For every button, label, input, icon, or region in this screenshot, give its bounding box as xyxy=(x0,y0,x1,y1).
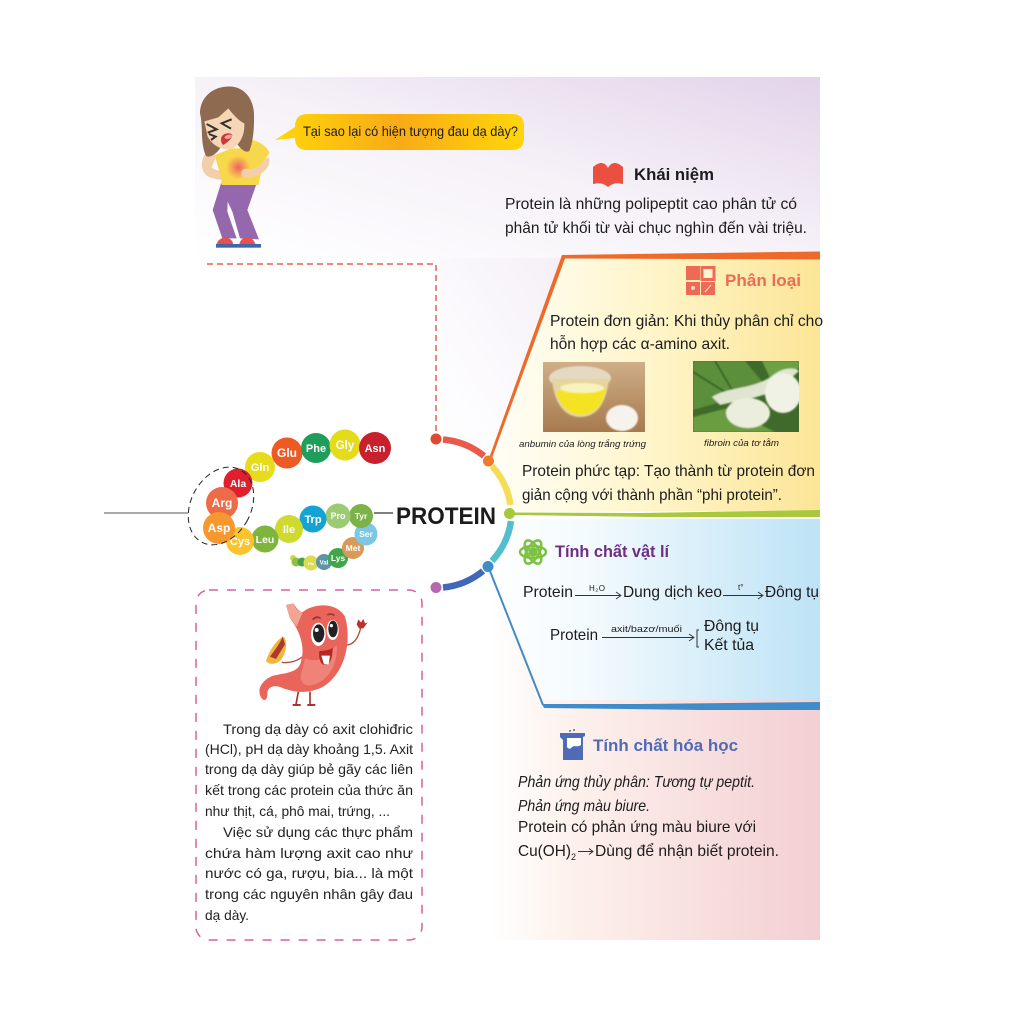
diagram: amino acid chain: Phe xyxy=(306,443,326,455)
upper body and head xyxy=(200,87,270,185)
text block: chemical reactions: Cu(OH) xyxy=(518,843,571,860)
diagram: amino acid chain: Glu xyxy=(277,446,297,460)
illustration: woman with stomach ache xyxy=(200,87,270,248)
equation: protein in water: Đông tụ xyxy=(765,584,819,601)
icon: classification squares xyxy=(686,266,715,295)
node: green xyxy=(504,508,515,519)
callout: speech bubble question: Tại sao lại có hiện tượng đau dạ dày? xyxy=(303,124,518,139)
diagram: amino acid chain: Met xyxy=(346,543,360,553)
node: orange xyxy=(483,456,494,466)
diagram: amino acid chain xyxy=(175,430,391,570)
diagram: amino acid chain: Cys xyxy=(230,536,250,548)
text block: simple protein: hỗn hợp các α-amino axit. xyxy=(550,334,730,353)
equation: protein with acid, base, salt: Đông tụ xyxy=(704,618,759,635)
text block: stomach acid xyxy=(205,722,413,923)
text block: stomach acid: Việc sử dụng các thực phẩm xyxy=(223,825,413,840)
text block: complex protein: giản cộng với thành phần “phi protein”. xyxy=(522,487,782,504)
connector: chain to title xyxy=(374,512,393,514)
node: red xyxy=(430,434,442,444)
text block: definition xyxy=(505,196,807,237)
diagram: amino acid chain: Lys xyxy=(331,553,345,563)
diagram: amino acid chain: Asp xyxy=(208,521,230,535)
highlight: dashed ellipse around amino acids xyxy=(175,456,267,556)
diagram: amino acid chain: Leu xyxy=(256,534,274,546)
text block: definition: Protein là những polipeptit cao phân tử có xyxy=(505,196,797,213)
equation: protein with acid, base, salt: axit/bazơ/muối xyxy=(611,624,682,635)
equation: protein with acid, base, salt: Protein xyxy=(550,627,598,644)
icon: book xyxy=(593,163,623,187)
heading: Khái niệm: Khái niệm xyxy=(634,166,714,184)
diagram: amino acid chain: Gly xyxy=(336,440,355,452)
title: PROTEIN xyxy=(396,503,496,530)
equation: protein in water: Protein xyxy=(523,584,573,601)
equation: protein with acid, base, salt xyxy=(550,618,759,654)
text block: stomach acid: nước có ga, rượu, bia... là một xyxy=(205,866,413,881)
text block: complex protein: Protein phức tạp: Tạo thành từ protein đơn xyxy=(522,463,815,480)
equation: protein in water: t° xyxy=(738,583,743,592)
diagram: amino acid chain: His xyxy=(308,561,315,566)
equation: protein in water: Dung dịch keo xyxy=(623,584,722,601)
heading: Tính chất vật lí: Tính chất vật lí xyxy=(555,543,670,561)
text block: simple protein: Protein đơn giản: Khi thủy phân chỉ cho xyxy=(550,313,823,330)
panel: fade below top background xyxy=(440,258,570,462)
image: silkworm and cocoons on leaves xyxy=(693,361,801,432)
panel: physical properties xyxy=(488,519,820,710)
text block: chemical reactions: Dùng để nhận biết protein. xyxy=(595,842,779,860)
heading: Tính chất hóa học: Tính chất hóa học xyxy=(593,737,738,755)
panel: top background xyxy=(195,77,820,258)
diagram: amino acid chain: Ala xyxy=(230,478,246,490)
callout: speech bubble question xyxy=(275,114,524,150)
diagram: amino acid chain: Ile xyxy=(283,524,295,536)
diagram: amino acid chain: Pro xyxy=(330,511,346,521)
text block: stomach acid: trong dạ dày giúp bẻ gãy các liên xyxy=(205,762,413,777)
legs and shoes xyxy=(213,183,261,248)
panel: classification xyxy=(488,252,823,517)
diagram: amino acid chain: Tyr xyxy=(355,511,368,521)
text block: chemical reactions: Phản ứng màu biure. xyxy=(518,798,650,815)
equation: protein in water xyxy=(523,583,819,601)
text block: stomach acid: trong các nguyên nhân gây đau xyxy=(205,887,413,902)
diagram: amino acid chain: Asn xyxy=(365,443,386,455)
caption: fibroin: fibroin của tơ tằm xyxy=(704,438,779,449)
text block: stomach acid: Trong dạ dày có axit clohiđric xyxy=(223,722,413,737)
diagram: amino acid chain: Val xyxy=(320,560,329,566)
caption: albumin: anbumin của lòng trắng trứng xyxy=(519,439,647,450)
diagram: amino acid chain: Gln xyxy=(251,462,269,474)
text block: stomach acid: dạ dày. xyxy=(205,908,249,923)
connector: line to left edge xyxy=(104,512,188,514)
node: purple xyxy=(430,582,442,593)
diagram: amino acid chain: Ser xyxy=(359,529,374,539)
text block: stomach acid: kết trong các protein của thức ăn xyxy=(205,783,413,798)
text block: simple protein xyxy=(550,313,823,353)
panel: chemical properties background xyxy=(490,570,820,940)
equation: protein with acid, base, salt: Kết tủa xyxy=(704,637,754,654)
diagram: amino acid chain: Arg xyxy=(212,496,232,510)
connector: dashed line to woman xyxy=(207,264,436,433)
text block: stomach acid: như thịt, cá, phô mai, trứng, ... xyxy=(205,804,390,819)
heading: Phân loại: Phân loại xyxy=(725,271,801,290)
text block: chemical reactions: 2 xyxy=(571,852,576,862)
text block: stomach acid: (HCl), pH dạ dày khoảng 1,5. Axit xyxy=(205,742,413,757)
icon: beaker xyxy=(560,729,585,760)
text block: stomach acid: chứa hàm lượng axit cao như xyxy=(205,846,413,861)
text block: definition: phân tử khối từ vài chục nghìn đến vài triệu. xyxy=(505,220,807,237)
text block: chemical reactions xyxy=(518,774,779,862)
text block: chemical reactions: Protein có phản ứng màu biure với xyxy=(518,819,756,836)
text block: chemical reactions: Phản ứng thủy phân: Tương tự peptit. xyxy=(518,774,755,791)
node: blue xyxy=(482,561,494,572)
panel: stomach explanation xyxy=(196,590,422,940)
illustration: stomach character xyxy=(259,603,368,705)
image: egg white in glass bowl xyxy=(543,362,645,432)
icon: atom xyxy=(520,538,546,566)
diagram: central arc with nodes xyxy=(430,434,515,593)
text block: complex protein xyxy=(522,463,815,504)
equation: protein in water: H₂O xyxy=(589,584,605,593)
diagram: amino acid chain: Trp xyxy=(304,514,322,526)
